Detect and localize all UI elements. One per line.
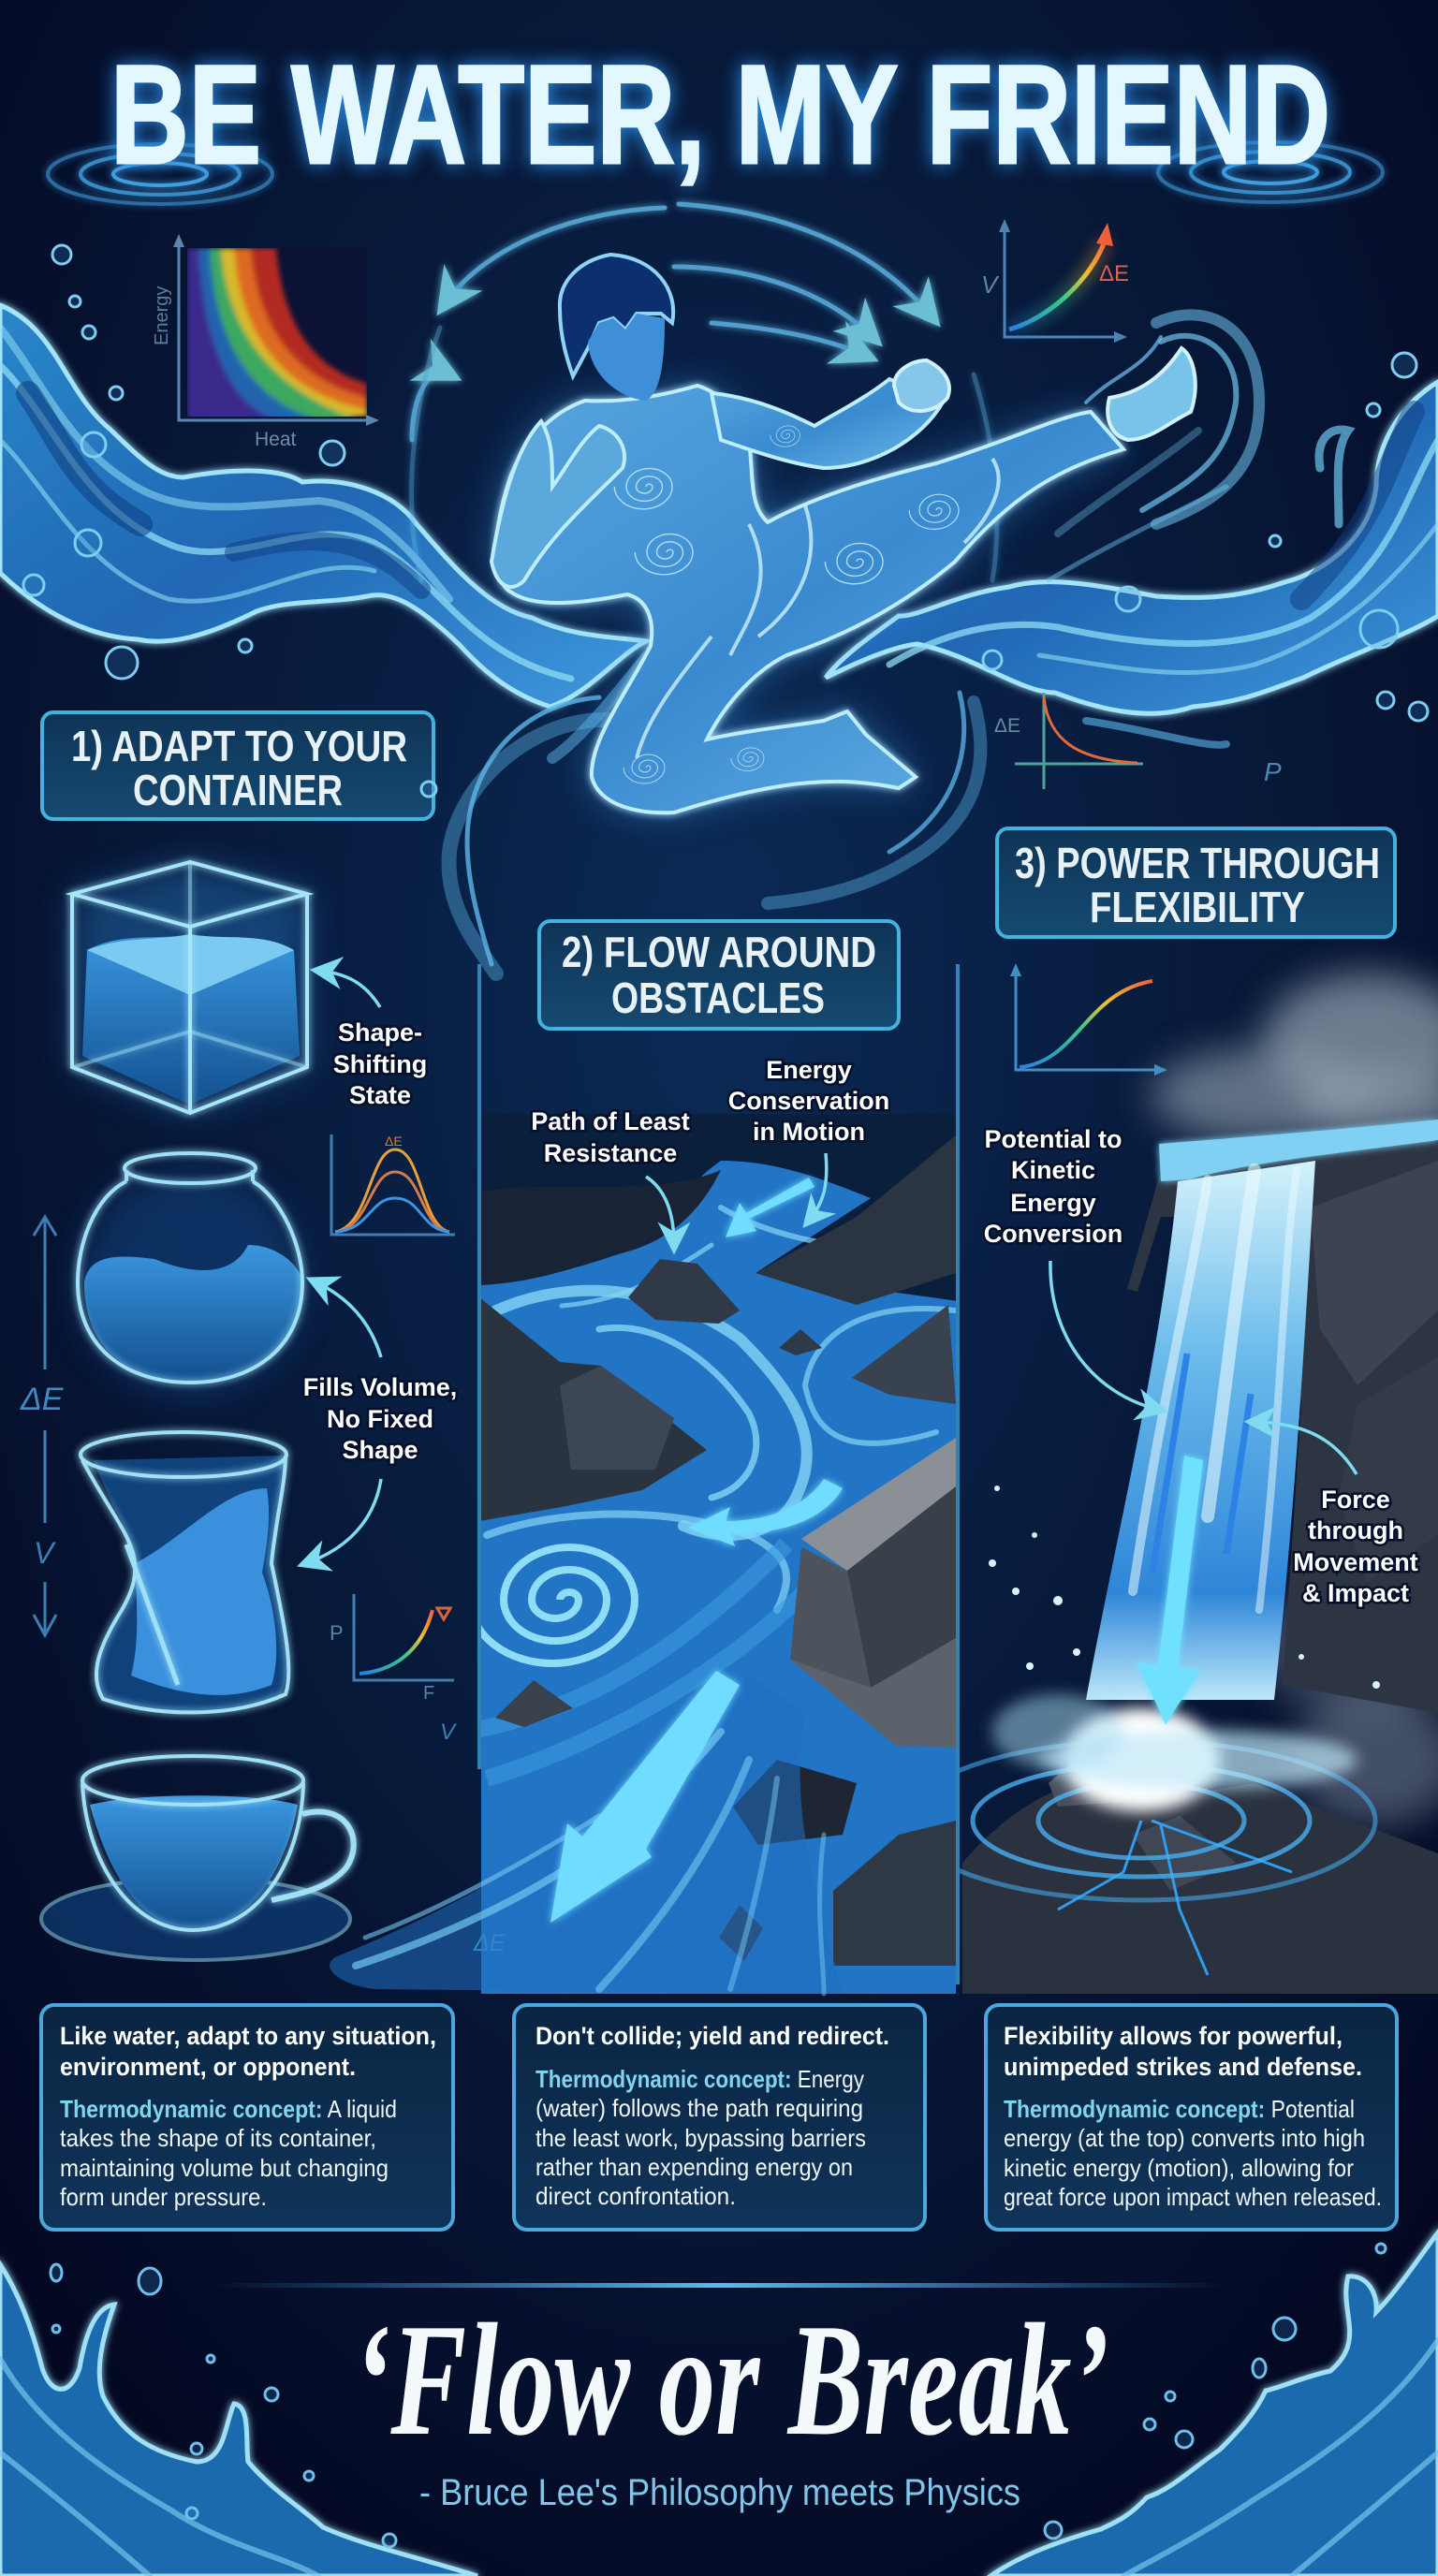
rocks upper — [481, 1170, 721, 1285]
callout: potential to kinetic: Energy — [1010, 1189, 1096, 1217]
card 2 — [514, 2005, 925, 2230]
icon: teacup and saucer — [41, 1756, 354, 1960]
icon: round vase — [78, 1153, 302, 1395]
callout: energy conservation: Conservation — [728, 1087, 889, 1115]
chart: pressure — [330, 1594, 457, 1745]
callout: path of least resistance: Path of Least — [531, 1107, 690, 1135]
callout: path of least resistance — [531, 1107, 690, 1245]
callout: fills volume — [303, 1281, 457, 1563]
icon: twisted glass — [81, 1432, 288, 1712]
bottom left water — [0, 2264, 477, 2576]
spray — [989, 1486, 1380, 1689]
card 1: takes the shape of its container, — [60, 2124, 376, 2152]
card 2: (water) follows the path requiring — [536, 2094, 863, 2122]
bubbles — [23, 245, 1428, 797]
card 2: direct confrontation. — [536, 2182, 736, 2210]
callout: force through movement: Force — [1321, 1486, 1390, 1514]
card 3: unimpeded strikes and defense. — [1004, 2053, 1362, 2081]
card 1: Like water, adapt to any situation, — [60, 2022, 436, 2050]
bottom right water — [990, 2232, 1438, 2576]
left energy axis — [34, 1217, 56, 1635]
chart: flexibility curve — [1010, 963, 1167, 1076]
hair — [560, 255, 673, 376]
rocks left — [479, 1297, 707, 1521]
card 1 — [41, 2005, 453, 2230]
heading 1 — [42, 712, 433, 819]
callout: potential to kinetic: Kinetic — [1011, 1156, 1095, 1184]
card 3: kinetic energy (motion), allowing for — [1004, 2154, 1354, 2182]
callout: fills volume: Fills Volume, — [303, 1373, 457, 1401]
callout: force through movement — [1254, 1422, 1418, 1607]
card 1: form under pressure. — [60, 2183, 267, 2211]
V text: V — [34, 1536, 56, 1570]
waterfall arrow — [1137, 1456, 1203, 1724]
callout: shape-shifting state: Shifting — [333, 1050, 427, 1078]
card 3: great force upon impact when released. — [1004, 2183, 1382, 2211]
callout: fills volume: No Fixed — [327, 1405, 433, 1433]
callout: fills volume: Shape — [342, 1436, 418, 1464]
callout: potential to kinetic — [984, 1125, 1159, 1410]
footer subtitle: - Bruce Lee's Philosophy meets Physics — [419, 2472, 1020, 2513]
water splash near kicking foot — [1049, 315, 1348, 580]
card 1: environment, or opponent. — [60, 2053, 356, 2081]
icon: cube container — [72, 862, 307, 1113]
river water — [481, 1161, 956, 1994]
chart: pressure: F — [423, 1683, 434, 1704]
left water wave — [0, 305, 646, 707]
figure: water martial artist — [492, 255, 1196, 812]
heading 1: CONTAINER — [133, 766, 343, 814]
card 3: Flexibility allows for powerful, — [1004, 2022, 1343, 2050]
callout: energy conservation — [728, 1056, 889, 1221]
chart: energy vs heat — [152, 234, 379, 450]
callout: energy conservation: Energy — [766, 1056, 852, 1084]
rock mid — [628, 1259, 740, 1324]
bottom bubbles — [51, 2244, 1386, 2547]
lower water fan — [330, 1676, 843, 1994]
callout: force through movement: through — [1308, 1516, 1403, 1544]
kicking foot — [1108, 348, 1196, 440]
card 3: Thermodynamic concept: Potential — [1004, 2095, 1355, 2123]
delta E text: ΔE — [20, 1382, 64, 1417]
rear arm — [712, 379, 944, 468]
right water wave — [826, 382, 1438, 713]
callout: path of least resistance: Resistance — [544, 1139, 677, 1167]
panel: waterfall — [907, 973, 1438, 1994]
fist right — [894, 360, 949, 411]
chart: v vs delta E: V — [981, 271, 1000, 299]
arrows in river — [550, 1178, 843, 1923]
callout: energy conservation: in Motion — [753, 1118, 865, 1146]
mist clouds — [1152, 973, 1438, 1825]
heading 3: FLEXIBILITY — [1090, 883, 1305, 931]
rocks right — [756, 1135, 956, 1305]
card 3: energy (at the top) converts into high — [1004, 2124, 1365, 2152]
callout: force through movement: & Impact — [1302, 1579, 1409, 1607]
callout: shape-shifting state — [319, 971, 427, 1109]
panel dividers — [479, 964, 958, 1984]
whirlpool — [470, 1547, 635, 1663]
chart: delta E vs P — [994, 693, 1282, 789]
rocky base — [962, 1774, 1438, 1994]
delta E label: ΔE — [473, 1930, 506, 1956]
concrete barrier — [790, 1438, 956, 1748]
falling water — [1086, 1161, 1315, 1700]
callout: force through movement: Movement — [1293, 1548, 1418, 1576]
chart: bell curves — [331, 1134, 455, 1235]
chart: bell curves: ΔE — [385, 1134, 403, 1149]
impact ripples — [907, 1741, 1375, 1900]
chart: v vs delta E — [981, 219, 1129, 343]
torso and legs — [496, 386, 1123, 812]
callout: potential to kinetic: Potential to — [985, 1125, 1122, 1153]
water lip — [1159, 1120, 1438, 1181]
card 2: Thermodynamic concept: Energy — [536, 2065, 864, 2093]
cracks — [1058, 1821, 1292, 1975]
heading 3 — [997, 828, 1395, 937]
footer slogan: ‘Flow or Break’ — [353, 2291, 1109, 2469]
title ripples — [48, 142, 1383, 204]
card 2: rather than expending energy on — [536, 2153, 853, 2181]
callout: potential to kinetic: Conversion — [984, 1220, 1123, 1248]
callout: shape-shifting state: State — [349, 1081, 411, 1109]
chart: delta E vs P: P — [1264, 757, 1282, 786]
chart: pressure: V — [440, 1720, 457, 1745]
card 2: the least work, bypassing barriers — [536, 2124, 866, 2152]
axis label: Energy — [152, 286, 172, 345]
circular flow arrows around figure — [412, 204, 997, 580]
front arm — [492, 421, 624, 587]
body swirls — [614, 426, 999, 783]
heading 2: OBSTACLES — [611, 973, 825, 1022]
rocks lower — [733, 1760, 857, 1845]
callout: shape-shifting state: Shape- — [338, 1018, 422, 1046]
card 1: Thermodynamic concept: A liquid — [60, 2095, 397, 2123]
chart: pressure: P — [330, 1621, 344, 1645]
heading 2 — [539, 921, 899, 1029]
heading 2: 2) FLOW AROUND — [562, 928, 876, 976]
river currents — [487, 1208, 955, 1610]
figure glow — [496, 386, 1123, 812]
left cliff and right cliff — [1127, 1137, 1438, 1713]
card 3 — [986, 2005, 1397, 2230]
face — [588, 314, 665, 401]
panel: river — [481, 1114, 956, 1994]
impact splash — [992, 1694, 1357, 1811]
card 2: Don't collide; yield and redirect. — [536, 2022, 889, 2050]
chart: delta E vs P: ΔE — [994, 715, 1020, 737]
footer divider — [211, 2283, 1229, 2288]
swirl below figure — [449, 646, 1226, 973]
heading 1: 1) ADAPT TO YOUR — [71, 722, 407, 770]
chart: v vs delta E: ΔE — [1099, 261, 1129, 286]
chart: energy vs heat: Heat — [255, 429, 297, 450]
card 1: maintaining volume but changing — [60, 2154, 389, 2182]
